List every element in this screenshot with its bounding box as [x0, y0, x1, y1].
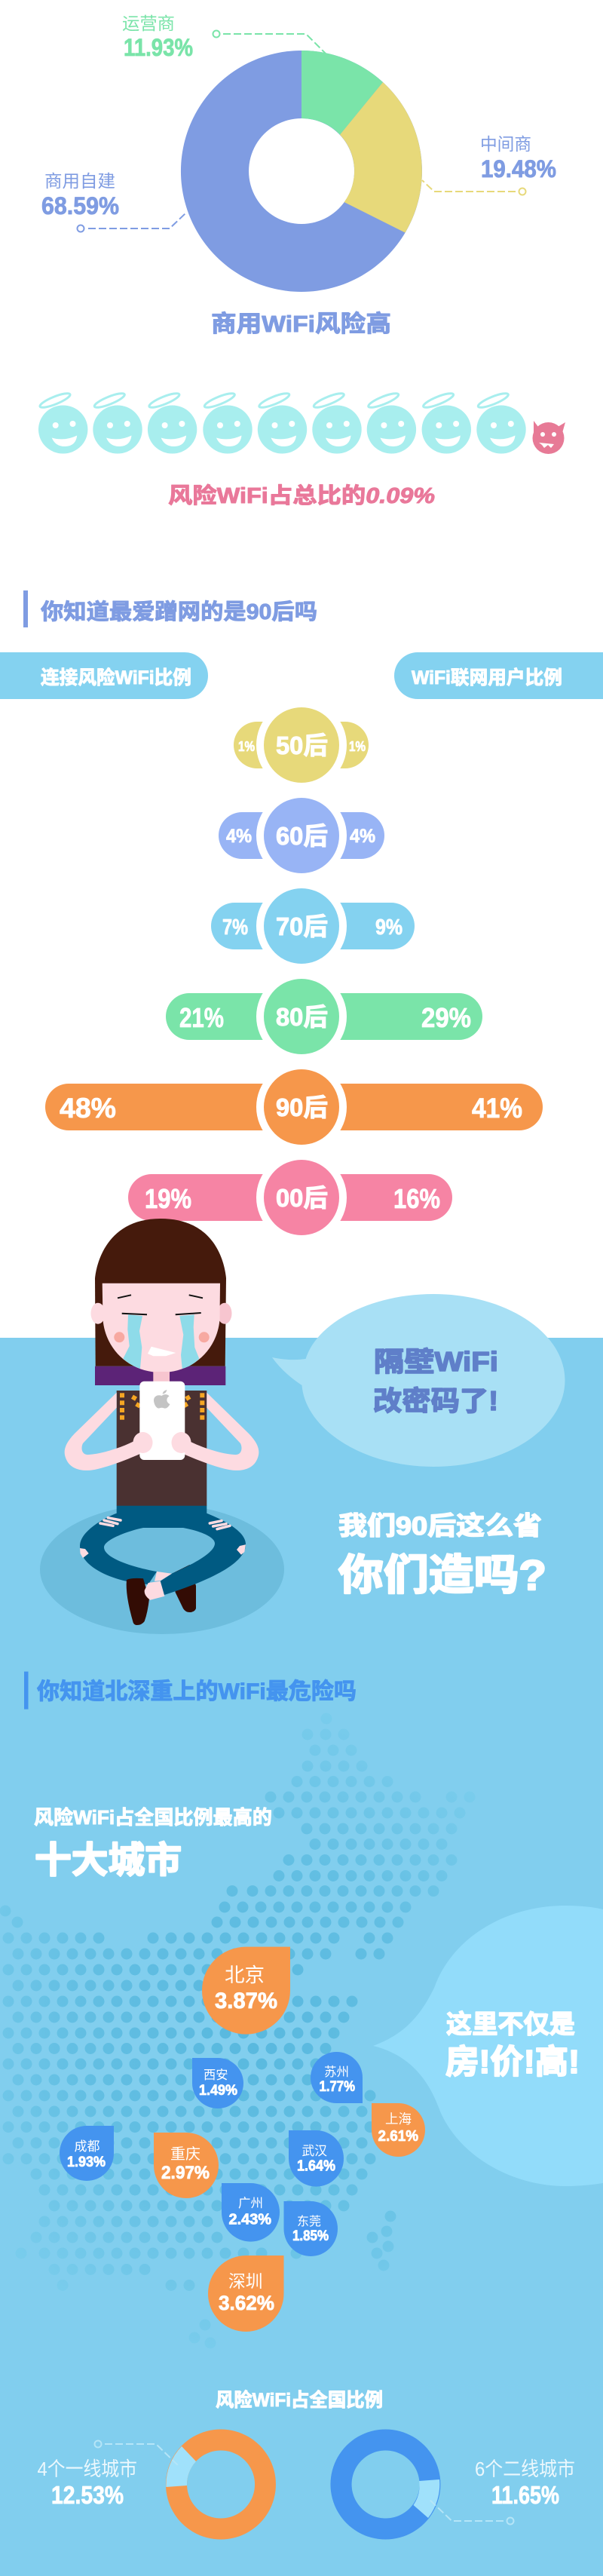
age bar: 80s: 80后 — [276, 1003, 328, 1031]
caption: risky WiFi share: 风险WiFi占总比的 0.09% — [168, 483, 435, 508]
donut chart: six tier-two cities — [330, 2430, 440, 2540]
jeans rips — [100, 1518, 230, 1529]
age bar: 60s: 4% — [350, 826, 375, 847]
age bar: 70s: 9% — [375, 915, 403, 940]
speech bubble: not just house prices — [373, 1906, 603, 2186]
label: self-built commercial: 商用自建 — [44, 171, 115, 191]
speech bubble: neighbour changed password — [272, 1294, 565, 1467]
label: self-built commercial — [41, 171, 185, 232]
label: six tier-two cities: 11.65% — [491, 2481, 559, 2509]
legend pill: share of WiFi users: WiFi联网用户比例 — [412, 667, 562, 688]
city drop: Xi'an: 1.49% — [199, 2083, 237, 2099]
label: operators — [122, 14, 326, 61]
blue background panel — [0, 1338, 603, 2576]
city drop: Shenzhen — [208, 2256, 283, 2332]
city drop: Chongqing — [154, 2133, 219, 2198]
slice: operators — [302, 51, 383, 135]
age bar: 90s — [45, 1062, 543, 1152]
city drop: Dongguan: 1.85% — [292, 2228, 329, 2244]
legend pill: share connecting to risky WiFi — [0, 652, 208, 699]
label: four tier-one cities: 12.53% — [51, 2481, 124, 2509]
speech bubble: not just house prices: 房!价!高! — [445, 2044, 580, 2081]
section heading: top tier cities — [24, 1672, 357, 1710]
speech bubble: neighbour changed password: 隔壁WiFi — [374, 1346, 498, 1377]
age bar: 50s: 1% — [238, 739, 255, 754]
slice: tier-two share — [413, 2479, 439, 2518]
city drop: Shanghai: 上海 — [385, 2111, 412, 2127]
age bar: 80s — [166, 971, 482, 1062]
city drop: Dongguan — [283, 2201, 338, 2256]
label: operators: 11.93% — [124, 34, 193, 61]
city drop: Wuhan: 武汉 — [302, 2144, 327, 2158]
lower ankle — [145, 1581, 164, 1600]
legend pill: share connecting to risky WiFi: 连接风险WiFi比例 — [41, 667, 191, 688]
city drop: Chengdu — [60, 2126, 114, 2181]
heading: share of national risky WiFi: 风险WiFi占全国比例 — [216, 2390, 383, 2411]
heading: top ten cities: 风险WiFi占全国比例最高的 — [34, 1806, 272, 1829]
age bar: 60s — [219, 790, 384, 881]
phone — [139, 1382, 185, 1460]
age bar: 00s — [128, 1152, 452, 1243]
icons: nine angel smileys — [38, 391, 526, 454]
dotted map of China — [5, 1719, 470, 2343]
city drop: Beijing: 北京 — [225, 1964, 265, 1986]
donut chart: commercial WiFi share — [181, 51, 422, 292]
age bar: 80s: 29% — [421, 1002, 471, 1033]
callout: we post-90s are so frugal: 你们造吗? — [338, 1551, 546, 1599]
label: six tier-two cities — [429, 2458, 575, 2525]
age bar: 00s: 19% — [145, 1183, 191, 1214]
label: four tier-one cities: 4个一线城市 — [38, 2458, 137, 2480]
heading: top ten cities — [34, 1806, 272, 1881]
age bar: 00s: 00后 — [276, 1184, 328, 1212]
age bar: 60s: 60后 — [276, 822, 328, 850]
neck — [153, 1372, 170, 1383]
collar — [95, 1366, 225, 1385]
age bar: 90s: 41% — [472, 1093, 522, 1124]
hands — [133, 1432, 191, 1453]
city drop: Wuhan — [289, 2130, 344, 2187]
slice: tier-one share — [166, 2446, 196, 2487]
city drop: Chengdu: 成都 — [74, 2139, 99, 2154]
slice: intermediaries — [340, 82, 422, 232]
near shoe — [127, 1578, 149, 1625]
speech bubble: not just house prices: 这里不仅是 — [446, 2010, 575, 2039]
city drop: Xi'an — [192, 2058, 243, 2108]
city drop: Shanghai: 2.61% — [378, 2128, 418, 2145]
label: self-built commercial: 68.59% — [41, 192, 119, 219]
ears — [90, 1303, 232, 1324]
callout: we post-90s are so frugal — [338, 1512, 546, 1599]
age bar: 70s: 7% — [222, 915, 248, 940]
vest — [117, 1391, 207, 1506]
city drop: Shenzhen: 3.62% — [219, 2292, 274, 2314]
far shoe — [172, 1565, 196, 1612]
city drop: Chongqing: 2.97% — [161, 2163, 210, 2183]
city drop: Guangzhou: 广州 — [238, 2196, 263, 2210]
age bar: 70s — [211, 881, 415, 971]
cheeks — [114, 1332, 210, 1342]
hair — [95, 1219, 226, 1366]
age bar: 50s: 50后 — [276, 731, 328, 759]
age bar: 90s: 90后 — [276, 1093, 328, 1121]
city drop: Wuhan: 1.64% — [297, 2158, 335, 2175]
age bar: 70s: 70后 — [276, 912, 328, 940]
section heading: top tier cities: 你知道北深重上的WiFi最危险吗 — [37, 1679, 357, 1704]
city drop: Suzhou: 1.77% — [320, 2079, 355, 2095]
heading: commercial WiFi risk: 商用WiFi风险高 — [211, 311, 391, 337]
city drop: Dongguan: 东莞 — [297, 2215, 321, 2228]
age bar: 90s: 48% — [60, 1093, 116, 1124]
label: intermediaries: 19.48% — [481, 155, 556, 182]
illustration: crying girl holding a phone — [40, 1219, 284, 1634]
eyebrows and closed eyes — [118, 1295, 203, 1314]
label: four tier-one cities — [38, 2440, 179, 2509]
city drop: Xi'an: 西安 — [204, 2068, 228, 2082]
apple logo — [154, 1390, 170, 1409]
icon: devil face — [532, 421, 565, 454]
tears — [123, 1314, 199, 1369]
age bar: 50s — [234, 700, 369, 790]
city drop: Shanghai — [372, 2103, 425, 2157]
label: operators: 运营商 — [122, 14, 175, 33]
vest studs — [120, 1393, 204, 1420]
city drop: Chengdu: 1.93% — [67, 2154, 106, 2170]
label: intermediaries: 中间商 — [480, 134, 531, 154]
city drop: Suzhou: 苏州 — [324, 2065, 349, 2079]
legend pill: share of WiFi users — [394, 652, 603, 699]
age bar: 80s: 21% — [179, 1002, 224, 1033]
heading: top ten cities: 十大城市 — [35, 1841, 182, 1881]
label: intermediaries — [422, 134, 556, 195]
face — [103, 1283, 220, 1372]
mouth — [148, 1347, 176, 1356]
speech bubble: neighbour changed password: 改密码了! — [373, 1385, 498, 1416]
city drop: Guangzhou: 2.43% — [229, 2212, 271, 2228]
city drop: Guangzhou — [222, 2183, 280, 2242]
upper ankle — [155, 1572, 172, 1581]
callout: we post-90s are so frugal: 我们90后这么省 — [338, 1512, 542, 1541]
section heading: 90s generation — [23, 590, 317, 627]
city drop: Shenzhen: 深圳 — [228, 2271, 262, 2291]
age bar: 50s: 1% — [349, 739, 366, 754]
knee holes — [80, 1544, 246, 1558]
city drop: Beijing: 3.87% — [215, 1989, 277, 2013]
ground shadow — [40, 1504, 284, 1634]
donut chart: four tier-one cities — [166, 2430, 276, 2540]
city drop: Chongqing: 重庆 — [170, 2145, 200, 2163]
label: six tier-two cities: 6个二线城市 — [475, 2458, 575, 2480]
age bar: 00s: 16% — [393, 1183, 440, 1214]
arms — [65, 1393, 259, 1470]
age bar: 60s: 4% — [226, 826, 252, 847]
section heading: 90s generation: 你知道最爱蹭网的是90后吗 — [41, 600, 317, 624]
city drop: Beijing — [202, 1947, 290, 2035]
jeans — [80, 1506, 246, 1595]
city drop: Suzhou — [311, 2052, 363, 2103]
